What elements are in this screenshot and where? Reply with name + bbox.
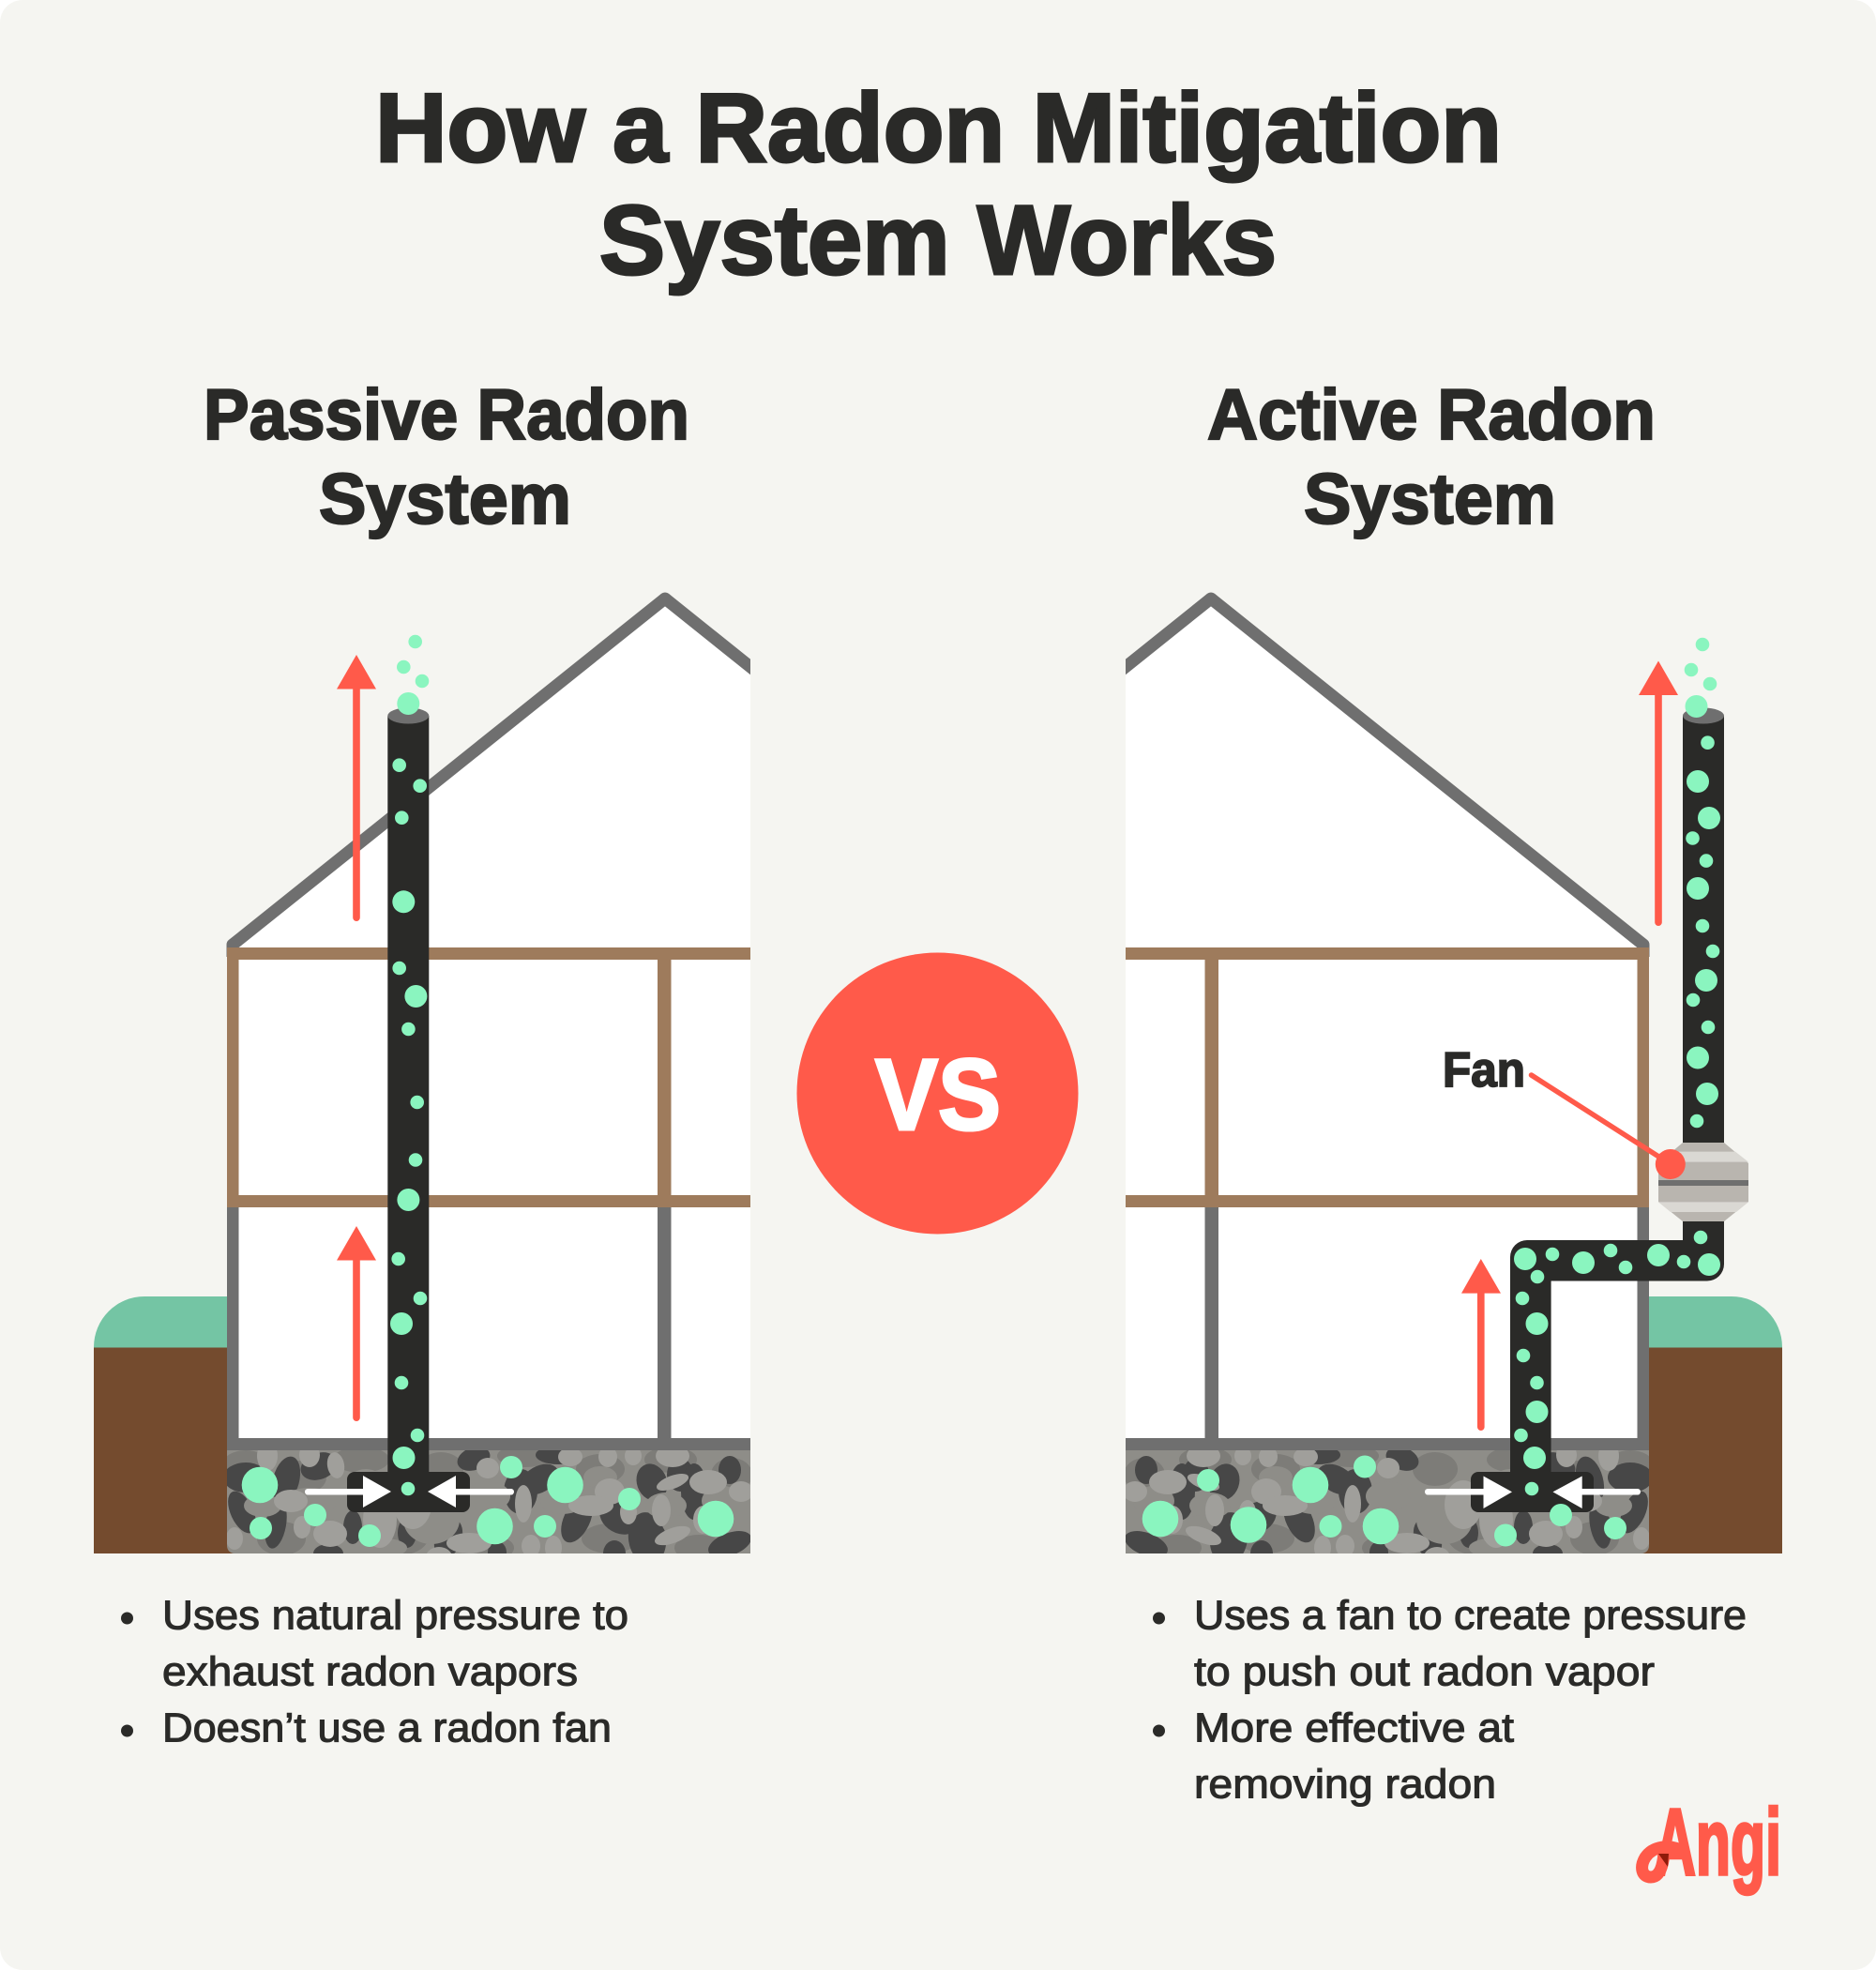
gravel layer — [227, 1450, 750, 1553]
fan unit — [1658, 1143, 1748, 1221]
passive system bullet list: Doesn’t use a radon fan — [162, 1705, 612, 1750]
title — [375, 74, 1502, 296]
red airflow arrow upper — [337, 655, 376, 921]
vent pipe — [347, 707, 470, 1512]
fan callout: Fan — [1443, 1043, 1525, 1098]
red airflow arrow lower — [1461, 1259, 1501, 1431]
vs badge: VS — [875, 1038, 1001, 1151]
ground: grass and soil — [1642, 1296, 1782, 1553]
heading: passive radon system — [204, 375, 689, 539]
panel: passive system diagram — [94, 599, 779, 1568]
title: How a Radon Mitigation — [375, 74, 1502, 183]
vs badge — [797, 953, 1079, 1235]
active system bullet list: removing radon — [1194, 1762, 1496, 1807]
heading: active radon system: Active Radon — [1207, 375, 1656, 455]
active system bullet list: Uses a fan to create pressure — [1194, 1593, 1747, 1638]
angi logo: Angi — [1655, 1790, 1781, 1895]
active system bullet list — [1153, 1593, 1747, 1807]
heading: active radon system — [1207, 375, 1656, 539]
radon particles — [1142, 638, 1720, 1546]
passive system bullet list: exhaust radon vapors — [162, 1649, 578, 1694]
house frame — [1097, 599, 1649, 1450]
passive system bullet list — [121, 1593, 628, 1750]
white suction arrows — [305, 1476, 514, 1508]
gravel layer — [1126, 1450, 1649, 1553]
panel: active system diagram — [1097, 599, 1782, 1568]
angi logo — [1642, 1790, 1781, 1895]
red airflow arrow lower — [337, 1226, 376, 1421]
fan callout — [1443, 1043, 1686, 1179]
heading: passive radon system: Passive Radon — [204, 375, 689, 455]
red airflow arrow upper — [1639, 660, 1678, 926]
heading: active radon system: System — [1304, 460, 1556, 539]
vent pipe — [1471, 707, 1724, 1512]
white suction arrows — [1425, 1477, 1641, 1508]
passive system bullet list: Uses natural pressure to — [162, 1593, 628, 1638]
heading: passive radon system: System — [319, 460, 571, 539]
active system bullet list: to push out radon vapor — [1194, 1649, 1655, 1694]
title: System Works — [599, 186, 1277, 296]
active system bullet list: More effective at — [1194, 1705, 1514, 1750]
ground: grass and soil — [94, 1296, 234, 1553]
house frame — [227, 599, 779, 1450]
radon particles — [242, 635, 734, 1547]
